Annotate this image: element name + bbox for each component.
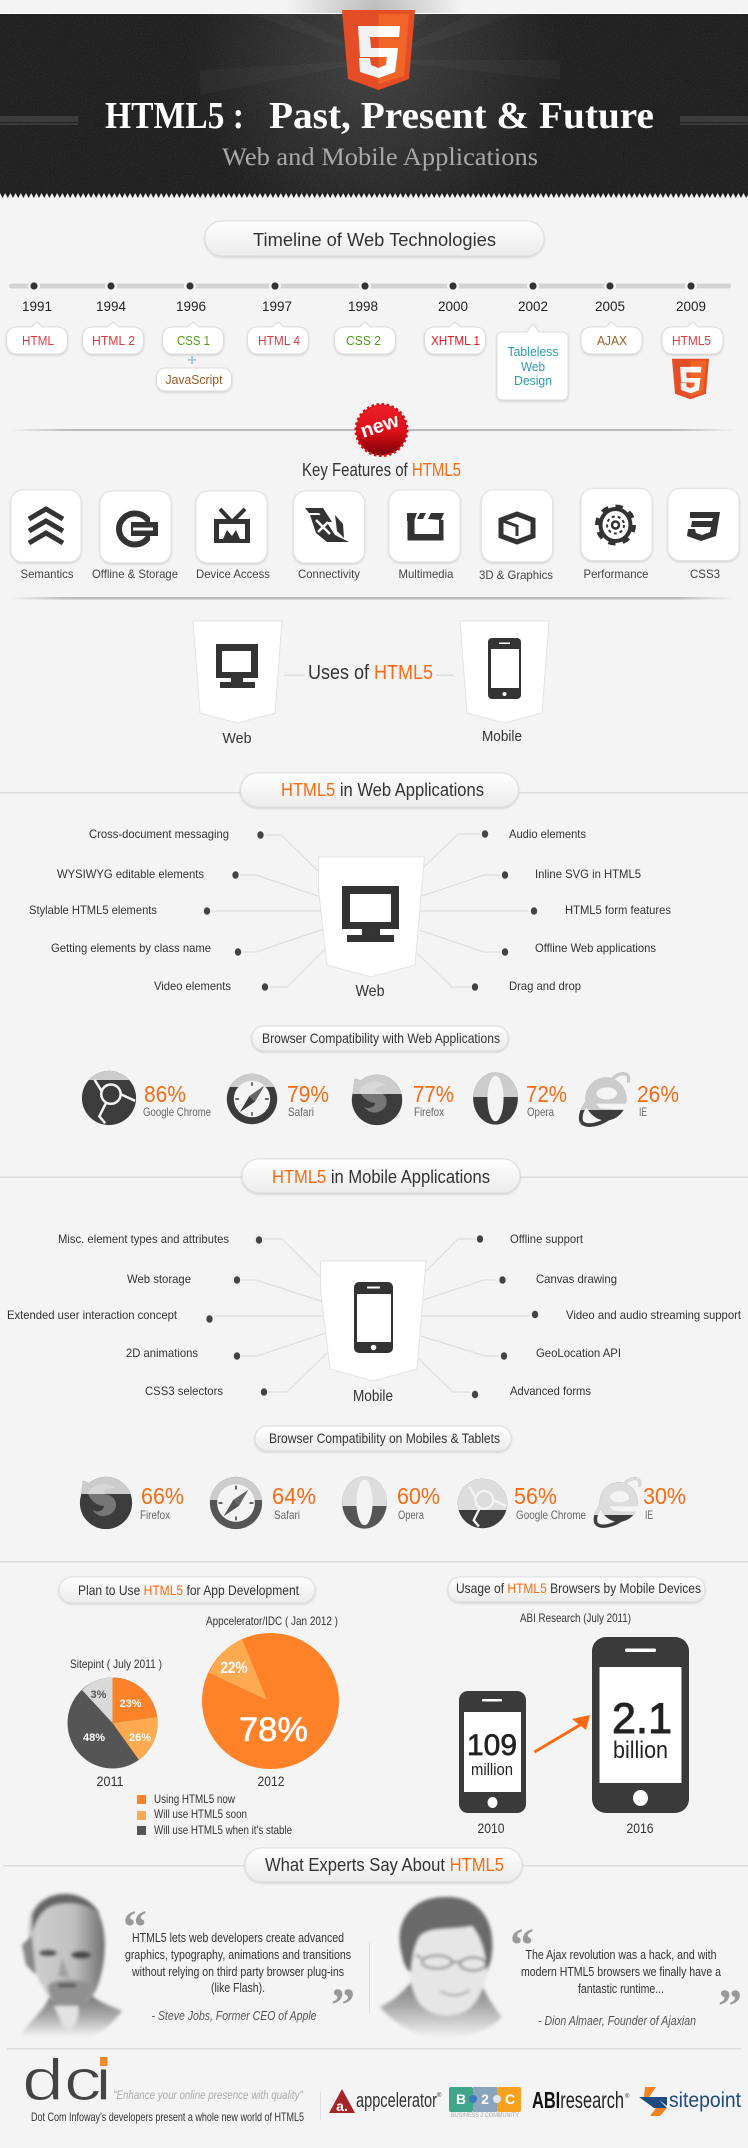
heading: What Experts Say About HTML5 [265, 1854, 504, 1875]
pie chart 2011 [68, 1657, 162, 1789]
logo: appcelerator [329, 2089, 442, 2114]
heading: uses of HTML5: Uses of HTML5 [308, 662, 433, 684]
feature list right [472, 827, 671, 993]
pie chart 2012: 2012 [258, 1773, 285, 1789]
browser: IE 26%: 26% [637, 1081, 679, 1107]
quote: Steve Jobs: (like Flash). [211, 1980, 265, 1995]
browser: Chrome 86% [82, 1071, 211, 1125]
timeline entry 2000 [424, 280, 486, 354]
quote: Dion Almaer: fantastic runtime... [578, 1981, 664, 1996]
browser: Opera 72%: 72% [526, 1081, 567, 1107]
icon: device [214, 509, 250, 543]
browser: Safari 64%: Safari [274, 1508, 300, 1522]
browser: Safari 64% [210, 1477, 316, 1529]
phone 2016 [592, 1637, 689, 1836]
feature list right: HTML5 form features [565, 903, 671, 917]
title [105, 95, 654, 137]
quote: Steve Jobs: graphics, typography, animations and transitions [125, 1947, 351, 1962]
timeline entry 2000: 2000 [438, 298, 468, 314]
pie chart 2011: Sitepint ( July 2011 ) [70, 1657, 162, 1671]
timeline entry 2009 [662, 280, 723, 399]
browser: Firefox 66%: 66% [141, 1483, 184, 1509]
quote: Dion Almaer: - Dion Almaer, Founder of Ajaxian [538, 2013, 696, 2028]
feature list left: Web storage [127, 1272, 191, 1286]
legend: Will use HTML5 soon [154, 1807, 247, 1821]
pie chart 2012 [202, 1614, 339, 1789]
feature list right: Offline Web applications [535, 941, 656, 955]
icon: storage ring [119, 514, 158, 545]
divider [0, 1561, 748, 1562]
logo: appcelerator: appcelerator [356, 2090, 437, 2112]
connector lines [214, 1239, 530, 1392]
heading: Browser Compatibility with Web Applications [262, 1030, 500, 1046]
phone 2016: billion [613, 1737, 668, 1764]
heading: key features: Key Features of HTML5 [302, 460, 461, 480]
feature: CSS3 [668, 488, 739, 581]
plus sign: + [187, 352, 197, 369]
timeline entry 1997: HTML 4 [258, 333, 300, 348]
pie chart 2011: 23% [119, 1698, 142, 1710]
phone 2010: million [471, 1760, 513, 1779]
timeline entry 1994: 1994 [96, 298, 126, 314]
heading [448, 1577, 705, 1602]
heading: Plan to Use HTML5 for App Development [78, 1582, 299, 1598]
feature: Multimedia [389, 490, 460, 581]
quote: Steve Jobs [125, 1930, 351, 2023]
feature list right: GeoLocation API [536, 1346, 621, 1360]
section: experts [3, 1848, 748, 2038]
browser: Opera 60%: Opera [398, 1508, 424, 1522]
pie chart 2012: Appcelerator/IDC ( Jan 2012 ) [206, 1614, 338, 1628]
icon: clapper [407, 513, 444, 537]
pie chart 2011: 26% [129, 1732, 151, 1744]
uses of HTML5 [193, 621, 549, 747]
feature list left: Getting elements by class name [51, 941, 211, 955]
shield: web [318, 857, 424, 1000]
browser: IE 30%: IE [645, 1508, 653, 1522]
timeline entry 2005: AJAX [597, 333, 627, 348]
quote: Steve Jobs: HTML5 lets web developers create advanced [132, 1930, 344, 1945]
feature: Device Access [196, 491, 270, 581]
browser: Opera 60% [342, 1476, 440, 1529]
timeline entry 1996: 1996 [176, 298, 206, 314]
timeline entry 1998: CSS 2 [346, 333, 381, 348]
feature: Semantics [11, 490, 81, 581]
feature: Multimedia: Multimedia [398, 567, 454, 581]
browser: IE 26%: IE [639, 1105, 647, 1119]
feature list left: Stylable HTML5 elements [29, 903, 157, 917]
timeline entry 1994 [82, 280, 144, 354]
pie chart 2012: 22% [220, 1658, 248, 1677]
phone 2010: 109 [467, 1729, 517, 1762]
portrait: Dion Almaer [380, 1897, 502, 2038]
heading [255, 1426, 511, 1451]
feature: Performance: Performance [584, 567, 649, 581]
feature list left: Video elements [154, 979, 231, 993]
shield: mobile: Mobile [353, 1388, 393, 1405]
timeline entry 1991: HTML [22, 333, 54, 348]
title: HTML5 : [105, 95, 244, 137]
logo: sitepoint [639, 2087, 741, 2116]
logo: business 2 community [449, 2087, 521, 2119]
footer [22, 2048, 741, 2124]
feature list right: Video and audio streaming support [566, 1308, 742, 1322]
feature: Offline and Storage: Offline & Storage [92, 567, 178, 581]
browser: Opera 72%: Opera [527, 1105, 554, 1119]
card: Web [193, 621, 282, 747]
feature list left: 2D animations [126, 1346, 198, 1360]
feature list right: Audio elements [509, 827, 586, 841]
browser: Opera 72% [473, 1072, 567, 1125]
phone 2016: 2.1 [612, 1695, 672, 1743]
browser: Safari 79%: 79% [287, 1081, 329, 1107]
feature: 3D and Graphics [479, 490, 553, 582]
timeline entry 2002: Tableless [508, 344, 559, 359]
feature: Semantics: Semantics [20, 567, 74, 581]
feature list right [472, 1232, 742, 1398]
heading [240, 773, 518, 807]
browser: Safari 64%: 64% [272, 1483, 316, 1509]
feature list left: Extended user interaction concept [7, 1308, 178, 1322]
timeline entry 1991: 1991 [22, 298, 52, 314]
heading [59, 1577, 315, 1603]
timeline entry 2002: Web [521, 359, 545, 374]
shield: web: Web [356, 983, 385, 1000]
divider [10, 597, 735, 600]
quote: Dion Almaer [521, 1947, 722, 2028]
section: HTML5 in mobile applications [0, 1159, 748, 1405]
logo: business 2 community: C [505, 2091, 515, 2107]
browser: Chrome 56%: 56% [514, 1483, 557, 1509]
card: Mobile [460, 621, 549, 745]
quote mark open: “ [510, 1919, 534, 1972]
feature: Connectivity [294, 491, 364, 581]
timeline entry 1994: HTML 2 [92, 333, 135, 348]
timeline entry 1997: 1997 [262, 298, 292, 314]
icon: small HTML5 logo [672, 359, 709, 399]
card: Mobile: Mobile [482, 728, 522, 745]
browser: Firefox 77%: Firefox [414, 1105, 444, 1119]
heading: Browser Compatibility on Mobiles & Tablets [269, 1430, 500, 1446]
heading: HTML5 in Web Applications [281, 779, 484, 800]
phone 2010: 2010 [478, 1820, 505, 1836]
subtitle: Web and Mobile Applications [222, 144, 538, 171]
timeline entry 1996: JavaScript [166, 372, 223, 387]
feature list left: Misc. element types and attributes [58, 1232, 229, 1246]
heading: Usage of HTML5 Browsers by Mobile Devices [456, 1580, 701, 1596]
phone 2016: 2016 [626, 1820, 654, 1836]
feature list left [29, 827, 268, 993]
timeline entry 1996 [156, 280, 232, 391]
icon: HTML5 shield logo [342, 10, 415, 90]
logo: ABI research: ® [625, 2093, 630, 2100]
phone 2010 [459, 1691, 526, 1836]
logo: business 2 community: BUSINESS 2 COMMUNITY [451, 2113, 519, 2119]
timeline entry 2002: 2002 [518, 298, 548, 314]
browser: Safari 79%: Safari [288, 1105, 314, 1119]
card: Web: Web [222, 730, 252, 747]
pie chart 2011: 48% [83, 1732, 105, 1744]
section: browser compatibility web [82, 1026, 679, 1125]
timeline entry 2000: XHTML 1 [431, 333, 480, 348]
section: browser compatibility mobile [80, 1426, 686, 1529]
heading [242, 1159, 520, 1193]
feature: CSS3: CSS3 [690, 567, 720, 581]
browser: IE 30%: 30% [643, 1483, 686, 1509]
logo: business 2 community: B [456, 2091, 466, 2107]
panel: plan to use HTML5 [59, 1577, 339, 1837]
heading: timeline [205, 221, 544, 256]
feature list left: CSS3 selectors [145, 1384, 223, 1398]
feature list right: Drag and drop [509, 979, 581, 993]
quote mark open: “ [123, 1901, 147, 1954]
icon: CSS3 shield [687, 512, 720, 541]
panel: usage of HTML5 browsers [448, 1577, 705, 1836]
feature: Offline and Storage [92, 491, 178, 581]
feature list right: Inline SVG in HTML5 [535, 867, 641, 881]
browser: Firefox 77% [352, 1075, 454, 1125]
icon: cube [501, 514, 533, 542]
logo: appcelerator: a. [336, 2098, 348, 2114]
legend: Will use HTML5 when it's stable [154, 1823, 292, 1837]
badge: new [356, 404, 407, 456]
heading: timeline: Timeline of Web Technologies [253, 229, 496, 250]
timeline entry 2005 [581, 280, 642, 354]
badge: new: new [358, 410, 402, 443]
feature list right: Offline support [510, 1232, 584, 1246]
footer text: Dot Com Infoway's developers present a whole new world of HTML5 [31, 2110, 304, 2124]
timeline entry 2009: HTML5 [672, 333, 711, 348]
icon: phone [488, 638, 521, 699]
browser: IE 26% [581, 1074, 679, 1125]
pie chart 2011: 2011 [96, 1773, 124, 1789]
timeline entry 2002: Design [514, 373, 552, 388]
timeline entry 1998: 1998 [348, 298, 378, 314]
logo: ABI research: ABIresearch [532, 2087, 624, 2113]
feature: Connectivity: Connectivity [298, 567, 360, 581]
quote mark close: ” [331, 1979, 355, 2032]
heading: HTML5 in Mobile Applications [272, 1166, 490, 1187]
feature list right: Advanced forms [510, 1384, 591, 1398]
header banner [0, 0, 748, 198]
timeline entry 2002 [497, 280, 568, 400]
feature list left: Cross-document messaging [89, 827, 229, 841]
timeline entry 2005: 2005 [595, 298, 625, 314]
browser: Chrome 86%: 86% [144, 1081, 186, 1107]
title: Past, Present & Future [269, 95, 654, 137]
feature list right: Canvas drawing [536, 1272, 617, 1286]
logo: business 2 community: 2 [481, 2091, 489, 2107]
icon: monitor [216, 644, 258, 688]
icon: phone [354, 1282, 393, 1353]
legend [137, 1792, 292, 1837]
browser: IE 30% [595, 1479, 686, 1526]
timeline entry 1996: CSS 1 [177, 333, 210, 348]
heading [252, 1026, 508, 1051]
quote: Steve Jobs: - Steve Jobs, Former CEO of Apple [152, 2008, 316, 2023]
browser: Firefox 66%: Firefox [140, 1508, 170, 1522]
source: ABI Research (July 2011) [520, 1611, 631, 1625]
feature list left [7, 1232, 267, 1398]
icon: connectivity [305, 508, 349, 542]
timeline entry 2009: 2009 [676, 298, 706, 314]
heading [245, 1848, 522, 1882]
timeline entry 1998 [334, 280, 396, 354]
browser: Firefox 66% [80, 1477, 184, 1529]
section: HTML5 in web applications [0, 773, 748, 1000]
divider [10, 429, 735, 431]
logo: appcelerator: ® [437, 2092, 442, 2099]
JavaScript box [156, 368, 232, 391]
tagline: "Enhance your online presence with quality" [113, 2088, 304, 2102]
arrow [534, 1715, 590, 1752]
timeline entry 1997 [248, 280, 308, 354]
timeline chart [6, 280, 731, 400]
browser: Chrome 56%: Google Chrome [516, 1508, 586, 1522]
feature list left: WYSIWYG editable elements [57, 867, 204, 881]
logo: dci: dci [22, 2048, 112, 2113]
feature: Performance [581, 488, 652, 581]
timeline entry 1991 [6, 280, 68, 354]
connector lines [212, 834, 529, 987]
shield: mobile [320, 1261, 426, 1405]
pie chart 2011: 3% [91, 1689, 107, 1701]
quote mark close: ” [718, 1980, 742, 2033]
pie chart 2012: 78% [239, 1711, 308, 1749]
browser: Chrome 86%: Google Chrome [143, 1105, 211, 1119]
icon: gear [597, 506, 634, 544]
portrait: Steve Jobs [19, 1894, 122, 2037]
browser: Safari 79% [227, 1074, 329, 1124]
browser: Chrome 56% [458, 1479, 586, 1528]
legend: Using HTML5 now [154, 1792, 235, 1806]
quote: Steve Jobs: without relying on third party browser plug-ins [131, 1964, 344, 1979]
feature: 3D and Graphics: 3D & Graphics [479, 568, 553, 582]
browser: Firefox 77%: 77% [413, 1081, 454, 1107]
divider [7, 2048, 741, 2050]
feature: Device Access: Device Access [196, 567, 270, 581]
icon: chevrons [29, 509, 63, 543]
browser: Opera 60%: 60% [397, 1483, 440, 1509]
logo: sitepoint: sitepoint [669, 2089, 741, 2112]
icon: monitor [342, 886, 399, 942]
